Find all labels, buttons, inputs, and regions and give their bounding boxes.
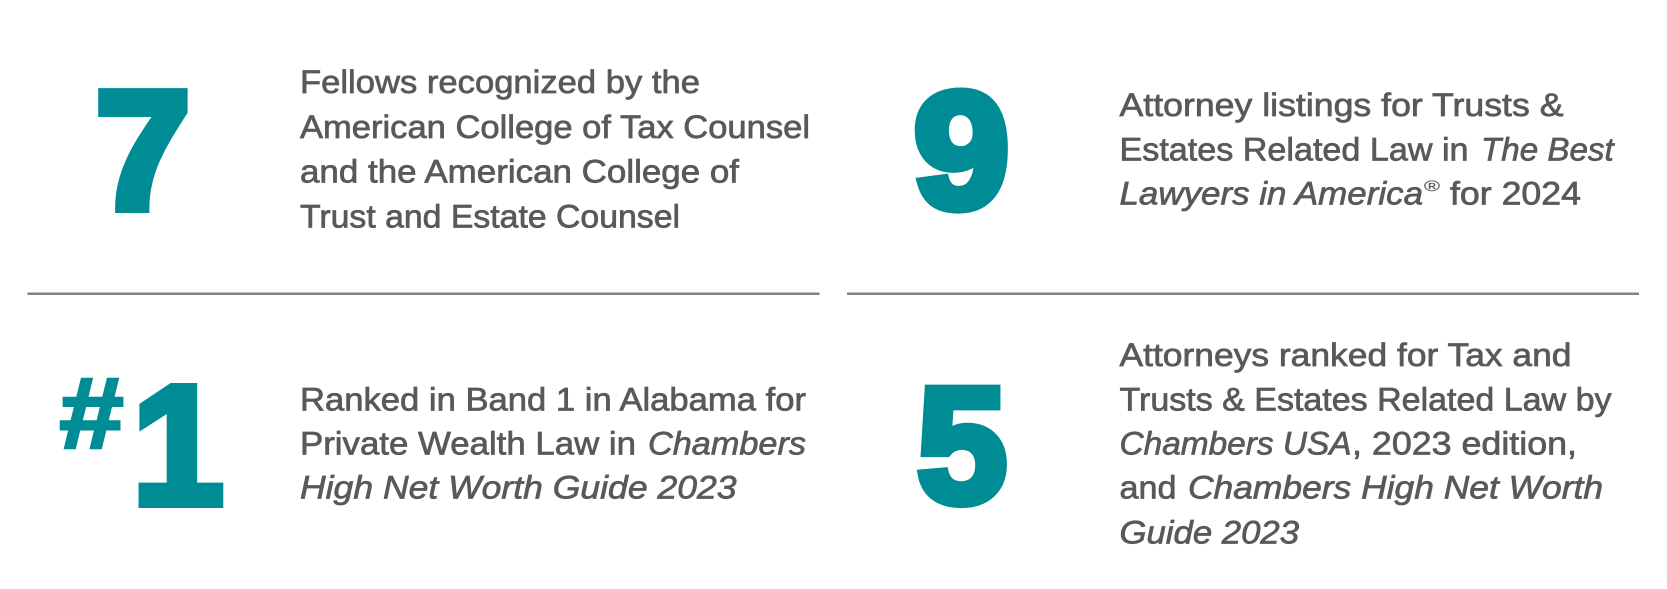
big number #1: 1 xyxy=(132,351,224,541)
description: attorneys ranked xyxy=(1120,337,1612,550)
description: fellows: Fellows recognized by the xyxy=(300,64,700,100)
description: attorney listings: Attorney listings for Trusts & xyxy=(1120,87,1564,123)
description: fellows xyxy=(300,64,810,234)
panel: five attorneys ranked xyxy=(917,337,1612,550)
description: attorneys ranked: Chambers USA xyxy=(1120,425,1352,461)
big number 9: 9 xyxy=(914,59,1009,242)
description: attorney listings: ® xyxy=(1424,178,1440,195)
description: fellows: and the American College of xyxy=(300,154,739,190)
divider: left xyxy=(28,292,820,295)
panel: nine attorney listings xyxy=(914,59,1615,242)
description: attorneys ranked: Attorneys ranked for Tax and xyxy=(1120,337,1572,373)
description: attorneys ranked: and xyxy=(1120,470,1176,506)
description: band 1 ranking: High Net Worth Guide 2023 xyxy=(300,470,737,506)
description: fellows: Trust and Estate Counsel xyxy=(300,198,680,234)
description: attorney listings: Estates Related Law in xyxy=(1120,131,1468,167)
divider: right xyxy=(847,292,1639,295)
big number #1: # xyxy=(60,358,124,470)
description: attorneys ranked: , 2023 edition, xyxy=(1352,425,1577,461)
description: attorneys ranked: Guide 2023 xyxy=(1120,514,1299,550)
description: band 1 ranking: Private Wealth Law in xyxy=(300,425,636,461)
description: attorneys ranked: Chambers High Net Worth xyxy=(1188,470,1603,506)
description: band 1 ranking xyxy=(300,381,806,506)
big number 7: 7 xyxy=(96,58,190,244)
description: attorney listings: The Best xyxy=(1481,131,1615,167)
description: attorney listings: for 2024 xyxy=(1450,175,1581,211)
description: band 1 ranking: Chambers xyxy=(648,425,806,461)
description: attorney listings: Lawyers in America xyxy=(1120,175,1423,211)
big number #1 xyxy=(60,351,224,541)
panel: number one ranking xyxy=(60,351,806,541)
description: attorney listings xyxy=(1120,87,1615,211)
description: attorneys ranked: Trusts & Estates Related Law by xyxy=(1120,381,1612,417)
description: band 1 ranking: Ranked in Band 1 in Alabama for xyxy=(300,381,806,417)
description: fellows: American College of Tax Counsel xyxy=(300,109,810,145)
panel: seven fellows xyxy=(96,58,810,244)
big number 5: 5 xyxy=(917,354,1007,537)
